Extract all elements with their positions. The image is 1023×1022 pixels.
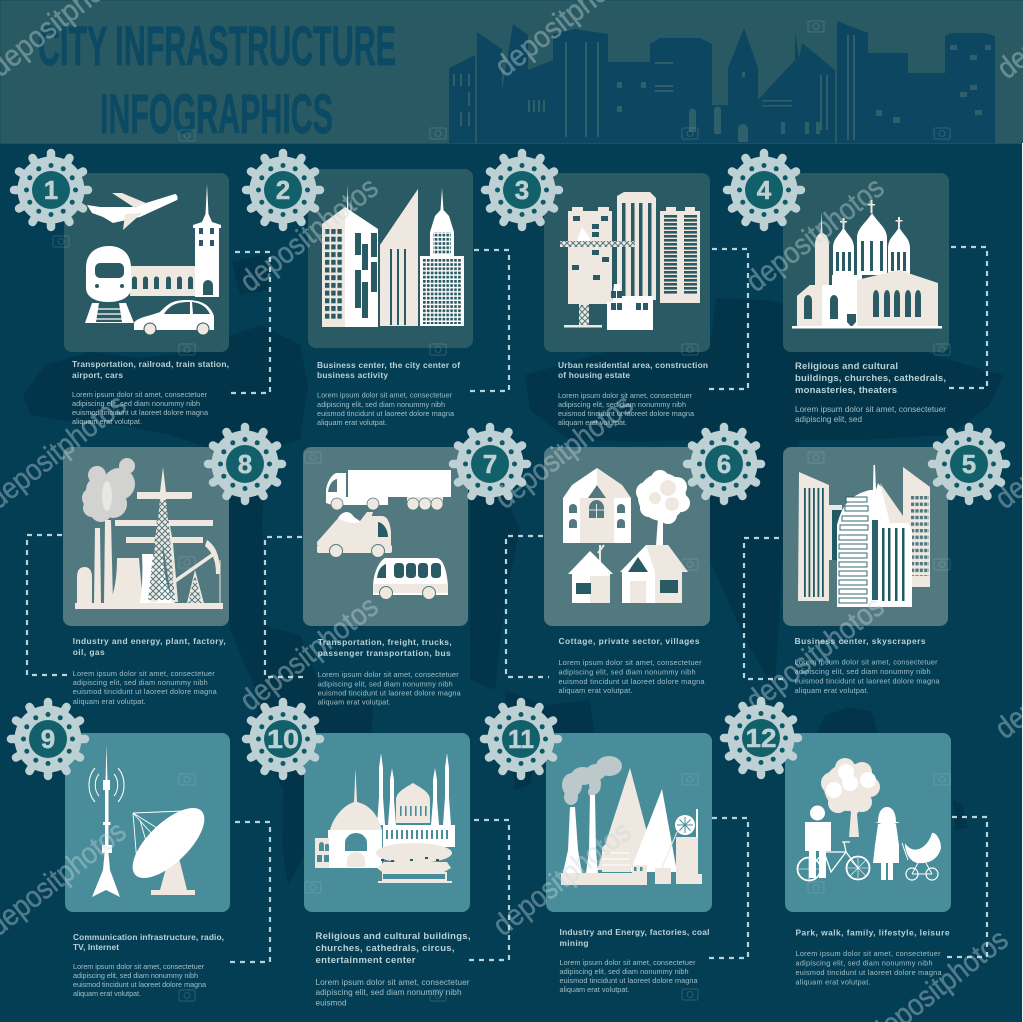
body text 6	[558, 658, 705, 695]
gear badge 10	[246, 702, 320, 776]
panel 11: coal mining	[484, 702, 748, 994]
skyline windows	[453, 35, 991, 142]
body text 12: aliquam erat volutpat.	[796, 978, 870, 986]
body text 12	[796, 949, 942, 986]
body text 7	[318, 670, 462, 707]
card 11	[546, 733, 712, 912]
card 1	[64, 173, 229, 352]
heading 5: Business center, skyscrapers	[795, 636, 926, 646]
city skyline silhouette	[449, 21, 995, 143]
connector 7	[265, 537, 308, 677]
gear badge 11: 11	[508, 724, 534, 754]
body text 4: Lorem ipsum dolor sit amet, consectetuer	[795, 405, 946, 414]
watermark overlay: depositphotos	[489, 388, 639, 516]
gear badge 1	[14, 153, 88, 227]
connector 12	[944, 817, 987, 957]
gear badge 6	[687, 427, 761, 501]
card 7	[303, 447, 468, 626]
gear badge 6: 6	[717, 449, 731, 479]
icon: cottages and tree	[563, 468, 690, 603]
panel 1: transportation	[14, 153, 270, 426]
body text 1: Lorem ipsum dolor sit amet, consectetuer	[72, 390, 208, 399]
heading 3	[558, 360, 708, 380]
icon: cathedral	[792, 200, 942, 328]
icon: truck, dump truck and bus	[317, 470, 451, 600]
panel 8: industry and energy	[27, 427, 282, 706]
heading 4: monasteries, theaters	[795, 385, 897, 396]
gear badge 11	[484, 702, 558, 776]
heading 11: mining	[560, 938, 588, 948]
body text 6: aliquam erat volutpat.	[558, 686, 632, 695]
icon: power plant, pylon and oil pump	[75, 458, 223, 609]
title line 1: CITY INFRASTRUCTURE	[38, 14, 396, 77]
icon: skyscrapers	[798, 465, 930, 607]
body text 1: aliquam erat volutpat.	[72, 417, 142, 426]
body text 8: euismod tincidunt ut laoreet dolore magna	[73, 687, 218, 696]
body text 4: adipiscing elit, sed	[795, 415, 862, 424]
connector 9	[227, 822, 270, 962]
panel 4: religious and cultural	[727, 153, 987, 424]
gear badge 4	[727, 153, 801, 227]
panel 5: skyscrapers	[744, 427, 1006, 695]
panel 9: communication	[11, 702, 270, 998]
body text 5: adipiscing elit, sed diam nonummy nibh	[795, 667, 931, 676]
heading 7: Transportation, freight, trucks,	[318, 637, 452, 647]
body text 11: adipiscing elit, sed diam nonummy nibh	[560, 967, 688, 976]
body text 11	[560, 958, 698, 994]
body text 9: Lorem ipsum dolor sit amet, consectetuer	[73, 962, 205, 971]
body text 12: Lorem ipsum dolor sit amet, consectetuer	[796, 949, 941, 958]
heading 3: of housing estate	[558, 370, 630, 380]
icon: factory and coal mine	[561, 756, 702, 885]
heading 4: Religious and cultural	[795, 361, 898, 372]
gear badge 7	[453, 427, 527, 501]
gear badge 9: 9	[41, 724, 55, 754]
body text 2: adipiscing elit, sed diam nonummy nibh	[317, 400, 445, 409]
body text 10: euismod	[316, 999, 347, 1008]
watermark overlay: depositphotos	[487, 815, 637, 943]
body text 11: aliquam erat volutpat.	[560, 985, 630, 994]
body text 6: adipiscing elit, sed diam nonummy nibh	[558, 668, 696, 676]
panel 12: park and leisure	[724, 701, 987, 986]
body text 8: Lorem ipsum dolor sit amet, consectetuer	[73, 669, 215, 678]
body text 9	[73, 962, 207, 998]
heading 4	[795, 361, 946, 396]
panel 6: cottages	[506, 427, 761, 695]
heading 10: entertainment center	[316, 955, 416, 966]
body text 7: aliquam erat volutpat.	[318, 698, 391, 707]
body text 5: aliquam erat volutpat.	[795, 686, 869, 695]
connector 5	[744, 538, 787, 679]
heading 10: Religious and cultural buildings,	[316, 931, 470, 942]
heading 3: Urban residential area, construction	[558, 360, 708, 370]
body text 8: adipiscing elit, sed diam nonummy nibh	[73, 678, 208, 687]
body text 5: euismod tincidunt ut laoreet dolore magna	[795, 676, 941, 686]
body text 1	[72, 390, 209, 426]
body text 6: Lorem ipsum dolor sit amet, consectetuer	[558, 658, 702, 667]
panel 10: religious and entertainment	[246, 702, 509, 1008]
icon: office towers	[322, 184, 464, 327]
heading 2: business activity	[317, 370, 388, 380]
heading 9	[73, 932, 224, 952]
heading 11: Industry and Energy, factories, coal	[560, 927, 710, 937]
header banner	[0, 0, 1023, 145]
body text 2	[317, 390, 455, 427]
card 10	[304, 733, 470, 912]
icon: family in a park	[798, 758, 941, 880]
icon: residential towers with crane	[560, 192, 700, 330]
world map silhouette	[23, 255, 1003, 885]
watermark overlay: depositphotos	[740, 171, 890, 299]
watermark overlay: depositphotos	[234, 590, 384, 718]
body text 6: euismod tincidunt ut laoreet dolore magna	[558, 677, 705, 686]
panel 3: urban residential	[485, 153, 748, 427]
body text 2: aliquam erat volutpat.	[317, 418, 387, 427]
card 2	[308, 169, 473, 348]
heading 8: oil, gas	[73, 647, 105, 657]
gear badge 5: 5	[962, 449, 976, 479]
heading 9: Communication infrastructure, radio,	[73, 932, 224, 942]
heading 6: Cottage, private sector, villages	[558, 636, 700, 646]
connector 3	[705, 249, 748, 389]
heading 2	[317, 360, 460, 380]
icon: mosque and circus	[315, 753, 455, 883]
watermark overlay: depositphotos	[234, 171, 384, 299]
gear badge 8: 8	[238, 449, 252, 479]
body text 10: Lorem ipsum dolor sit amet, consectetuer	[316, 978, 470, 987]
heading 1: airport, cars	[72, 370, 123, 380]
heading 1: Transportation, railroad, train station,	[72, 359, 229, 369]
gear badge 2	[246, 153, 320, 227]
connector 1	[227, 252, 270, 393]
body text 3: adipiscing elit, sed diam nonummy nibh	[558, 400, 686, 409]
heading 7	[318, 637, 452, 658]
body text 5: Lorem ipsum dolor sit amet, consectetuer	[795, 658, 938, 667]
card 5	[783, 447, 948, 626]
body text 12: euismod tincidunt ut laoreet dolore magna	[796, 968, 942, 977]
gear badge 12	[724, 701, 798, 775]
heading 10: churches, cathedrals, circus,	[316, 943, 454, 954]
body text 9: euismod tincidunt ut laoreet dolore magna	[73, 980, 207, 989]
heading 7: passenger transportation, bus	[318, 648, 451, 658]
gear badge 4: 4	[757, 175, 772, 205]
right edge sliver	[1022, 143, 1023, 1022]
gear badge 9	[11, 702, 85, 776]
connector 11	[705, 818, 748, 958]
body text 5	[795, 658, 941, 695]
gear badge 7: 7	[483, 449, 497, 479]
body text 4	[795, 405, 946, 424]
card 6	[544, 447, 710, 626]
card 9	[65, 733, 230, 912]
card 8	[63, 447, 229, 626]
card 12	[785, 733, 951, 912]
heading 10	[316, 931, 470, 966]
gear badge 12: 12	[746, 723, 776, 753]
icon: radio tower and satellite dish	[89, 745, 215, 897]
connector 6	[506, 536, 549, 677]
heading 1	[72, 359, 229, 380]
body text 11: euismod tincidunt ut laoreet dolore magna	[560, 976, 698, 985]
heading 11	[560, 927, 710, 948]
gear badge 3: 3	[515, 175, 529, 205]
body text 7: adipiscing elit, sed diam nonummy nibh	[318, 679, 453, 688]
title line 2: INFOGRAPHICS	[100, 82, 333, 145]
body text 7: Lorem ipsum dolor sit amet, consectetuer	[318, 670, 459, 679]
gear badge 10: 10	[267, 724, 299, 754]
connector 4	[944, 247, 987, 388]
panel 7: freight transport	[265, 427, 527, 707]
gear badge 2: 2	[276, 175, 290, 205]
body text 8: aliquam erat volutpat.	[73, 697, 146, 706]
gear badge 1: 1	[44, 175, 58, 205]
body text 3	[558, 391, 695, 427]
connector 10	[466, 820, 509, 960]
heading 4: buildings, churches, cathedrals,	[795, 373, 946, 384]
body text 7: euismod tincidunt ut laoreet dolore magna	[318, 689, 462, 698]
body text 9: aliquam erat volutpat.	[73, 989, 141, 998]
connector 2	[466, 250, 509, 391]
card 3	[544, 173, 710, 352]
body text 10	[316, 978, 470, 1008]
icon: plane, train station, train and car	[85, 184, 221, 335]
watermark overlay: depositphotos	[740, 590, 890, 718]
heading 8: Industry and energy, plant, factory,	[73, 636, 226, 646]
heading 2: Business center, the city center of	[317, 360, 460, 370]
heading 9: TV, Internet	[73, 942, 119, 952]
gear badge 3	[485, 153, 559, 227]
body text 11: Lorem ipsum dolor sit amet, consectetuer	[560, 958, 696, 967]
heading 12: Park, walk, family, lifestyle, leisure	[796, 928, 950, 938]
body text 1: adipiscing elit, sed diam nonummy nibh	[72, 399, 200, 408]
connector 8	[27, 535, 71, 675]
body text 2: euismod tincidunt ut laoreet dolore magna	[317, 409, 455, 418]
gear badge 8	[208, 427, 282, 501]
body text 12: adipiscing elit, sed diam nonummy nibh	[796, 959, 932, 968]
body text 2: Lorem ipsum dolor sit amet, consectetuer	[317, 390, 453, 400]
body text 3: euismod tincidunt ut laoreet dolore magna	[558, 409, 695, 418]
body text 3: aliquam erat volutpat.	[558, 418, 627, 427]
body text 9: adipiscing elit, sed diam nonummy nibh	[73, 971, 198, 980]
body text 1: euismod tincidunt ut laoreet dolore magna	[72, 408, 209, 417]
gear badge 5	[932, 427, 1006, 501]
body text 8	[73, 669, 218, 706]
body text 3: Lorem ipsum dolor sit amet, consectetuer	[558, 391, 693, 400]
body text 10: adipiscing elit, sed diam nonummy nibh	[316, 988, 462, 997]
panel 2: business center	[246, 153, 509, 427]
heading 8	[73, 636, 226, 657]
card 4	[783, 173, 949, 352]
